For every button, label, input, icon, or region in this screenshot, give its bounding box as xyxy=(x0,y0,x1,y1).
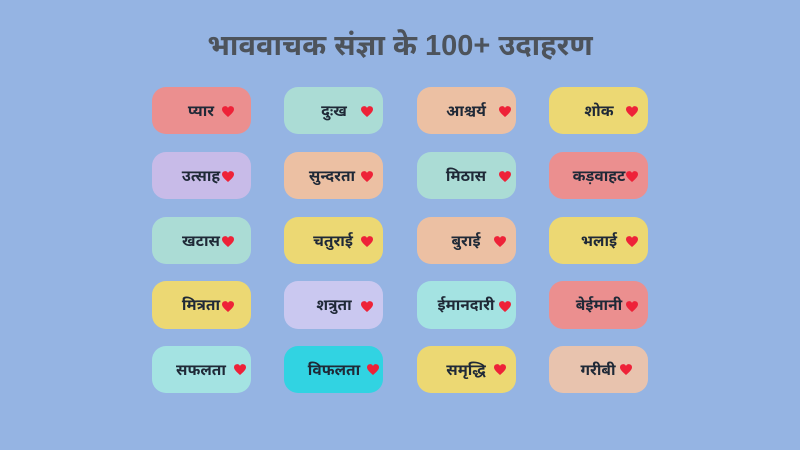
card: शोक: शोक xyxy=(584,103,614,120)
card: खटास: खटास xyxy=(182,233,220,250)
card: मित्रता: मित्रता xyxy=(182,297,220,314)
card: कड़वाहट: कड़वाहट xyxy=(573,168,625,185)
card: ईमानदारी: ईमानदारी xyxy=(438,297,494,314)
card: दुःख: दुःख xyxy=(321,103,347,120)
card: बुराई: बुराई xyxy=(451,233,481,250)
card: बुराई xyxy=(417,217,516,264)
card: सुन्दरता: सुन्दरता xyxy=(309,168,355,185)
title: भाववाचक संज्ञा के 100+ उदाहरण xyxy=(207,30,593,62)
card: मिठास: मिठास xyxy=(446,168,486,185)
card: उत्साह xyxy=(152,152,251,199)
card: भलाई xyxy=(549,217,648,264)
card: विफलता: विफलता xyxy=(308,362,360,379)
card: बेईमानी xyxy=(549,281,648,329)
card: विफलता xyxy=(284,346,383,393)
card: मित्रता xyxy=(152,281,251,329)
card: खटास xyxy=(152,217,251,264)
card: गरीबी: गरीबी xyxy=(580,362,616,379)
card: बेईमानी: बेईमानी xyxy=(576,297,622,314)
card: आश्चर्य: आश्चर्य xyxy=(446,103,486,120)
card: चतुराई: चतुराई xyxy=(313,233,353,250)
card: उत्साह: उत्साह xyxy=(182,168,220,185)
card: गरीबी xyxy=(549,346,648,393)
card: शत्रुता xyxy=(284,281,383,329)
card: मिठास xyxy=(417,152,516,199)
card: कड़वाहट xyxy=(549,152,648,199)
card: ईमानदारी xyxy=(417,281,516,329)
card: शोक xyxy=(549,87,648,134)
card: समृद्धि: समृद्धि xyxy=(446,362,486,379)
card: आश्चर्य xyxy=(417,87,516,134)
card: दुःख xyxy=(284,87,383,134)
card: समृद्धि xyxy=(417,346,516,393)
card: शत्रुता: शत्रुता xyxy=(316,297,352,314)
card: चतुराई xyxy=(284,217,383,264)
card: प्यार xyxy=(152,87,251,134)
card: सुन्दरता xyxy=(284,152,383,199)
card: प्यार: प्यार xyxy=(188,103,214,120)
card: सफलता: सफलता xyxy=(176,362,226,379)
card: सफलता xyxy=(152,346,251,393)
card: भलाई: भलाई xyxy=(581,233,617,250)
